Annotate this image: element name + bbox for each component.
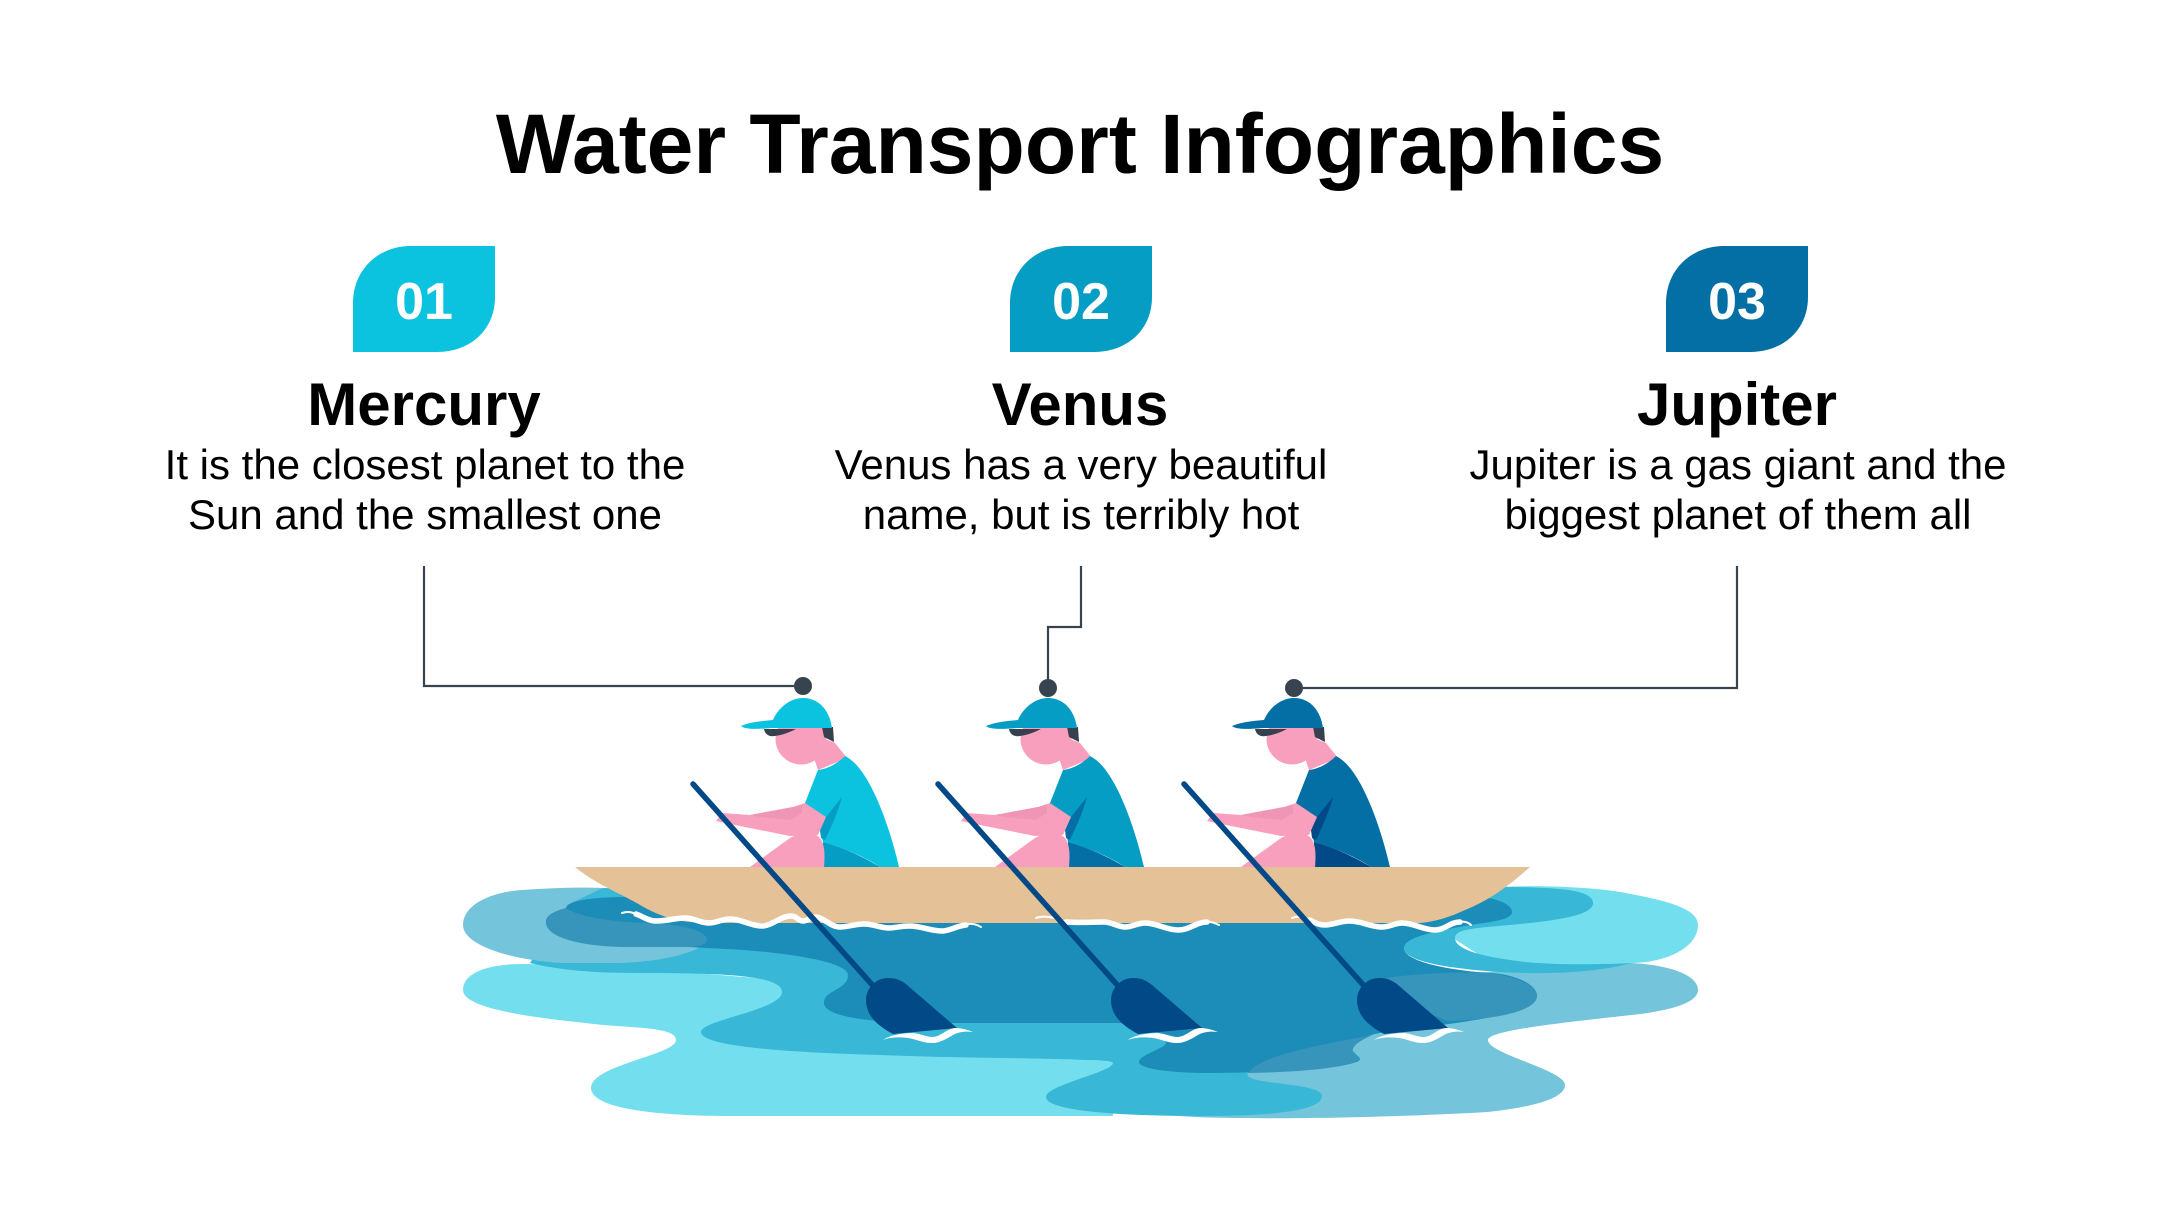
leg	[750, 834, 825, 867]
text: Mercury description	[165, 441, 685, 538]
oar 2	[938, 784, 1202, 1034]
connector: Mercury to first rower	[424, 566, 812, 695]
oar 3	[1184, 784, 1448, 1034]
text: Mercury description: Sun and the smallest one	[188, 491, 662, 538]
water ripples at oar blades	[883, 1028, 1464, 1043]
neck	[814, 738, 847, 770]
text: Jupiter description: Jupiter is a gas giant and the	[1469, 441, 2007, 488]
rower 2	[961, 698, 1144, 867]
oars	[693, 784, 1448, 1034]
connector: Venus to second rower	[1039, 566, 1081, 697]
front arm	[716, 803, 826, 836]
oar 1	[693, 784, 957, 1034]
text: Jupiter description	[1469, 441, 2007, 538]
panel: Venus	[835, 246, 1327, 538]
text: Jupiter description: biggest planet of them all	[1505, 491, 1971, 538]
heading: Venus: Venus	[992, 371, 1168, 438]
rower 1	[716, 698, 899, 867]
badge 03	[1666, 246, 1808, 352]
text: Venus description: name, but is terribly hot	[863, 491, 1300, 538]
heading: Jupiter: Jupiter	[1637, 371, 1837, 438]
title: Water Transport Infographics	[496, 97, 1664, 191]
text: Mercury description: It is the closest planet to the	[165, 441, 685, 488]
water	[463, 886, 1698, 1118]
text: Venus description: Venus has a very beautiful	[835, 441, 1327, 488]
badge 01: 01	[395, 273, 453, 331]
cap	[741, 698, 832, 729]
badge 02: 02	[1052, 273, 1110, 331]
heading: Mercury: Mercury	[307, 371, 541, 438]
panel: Jupiter	[1469, 246, 2007, 538]
panel: Mercury	[165, 246, 685, 538]
badge 01	[353, 246, 495, 352]
water ripples at boat	[622, 912, 1471, 931]
connector: Jupiter to third rower	[1285, 566, 1737, 697]
hair	[764, 727, 834, 742]
rower 3	[1207, 698, 1390, 867]
face	[776, 714, 826, 764]
boat	[575, 867, 1530, 923]
shirt	[805, 756, 899, 867]
text: Venus description	[835, 441, 1327, 538]
badge 02	[1010, 246, 1152, 352]
trousers	[822, 842, 880, 867]
badge 03: 03	[1708, 273, 1766, 331]
